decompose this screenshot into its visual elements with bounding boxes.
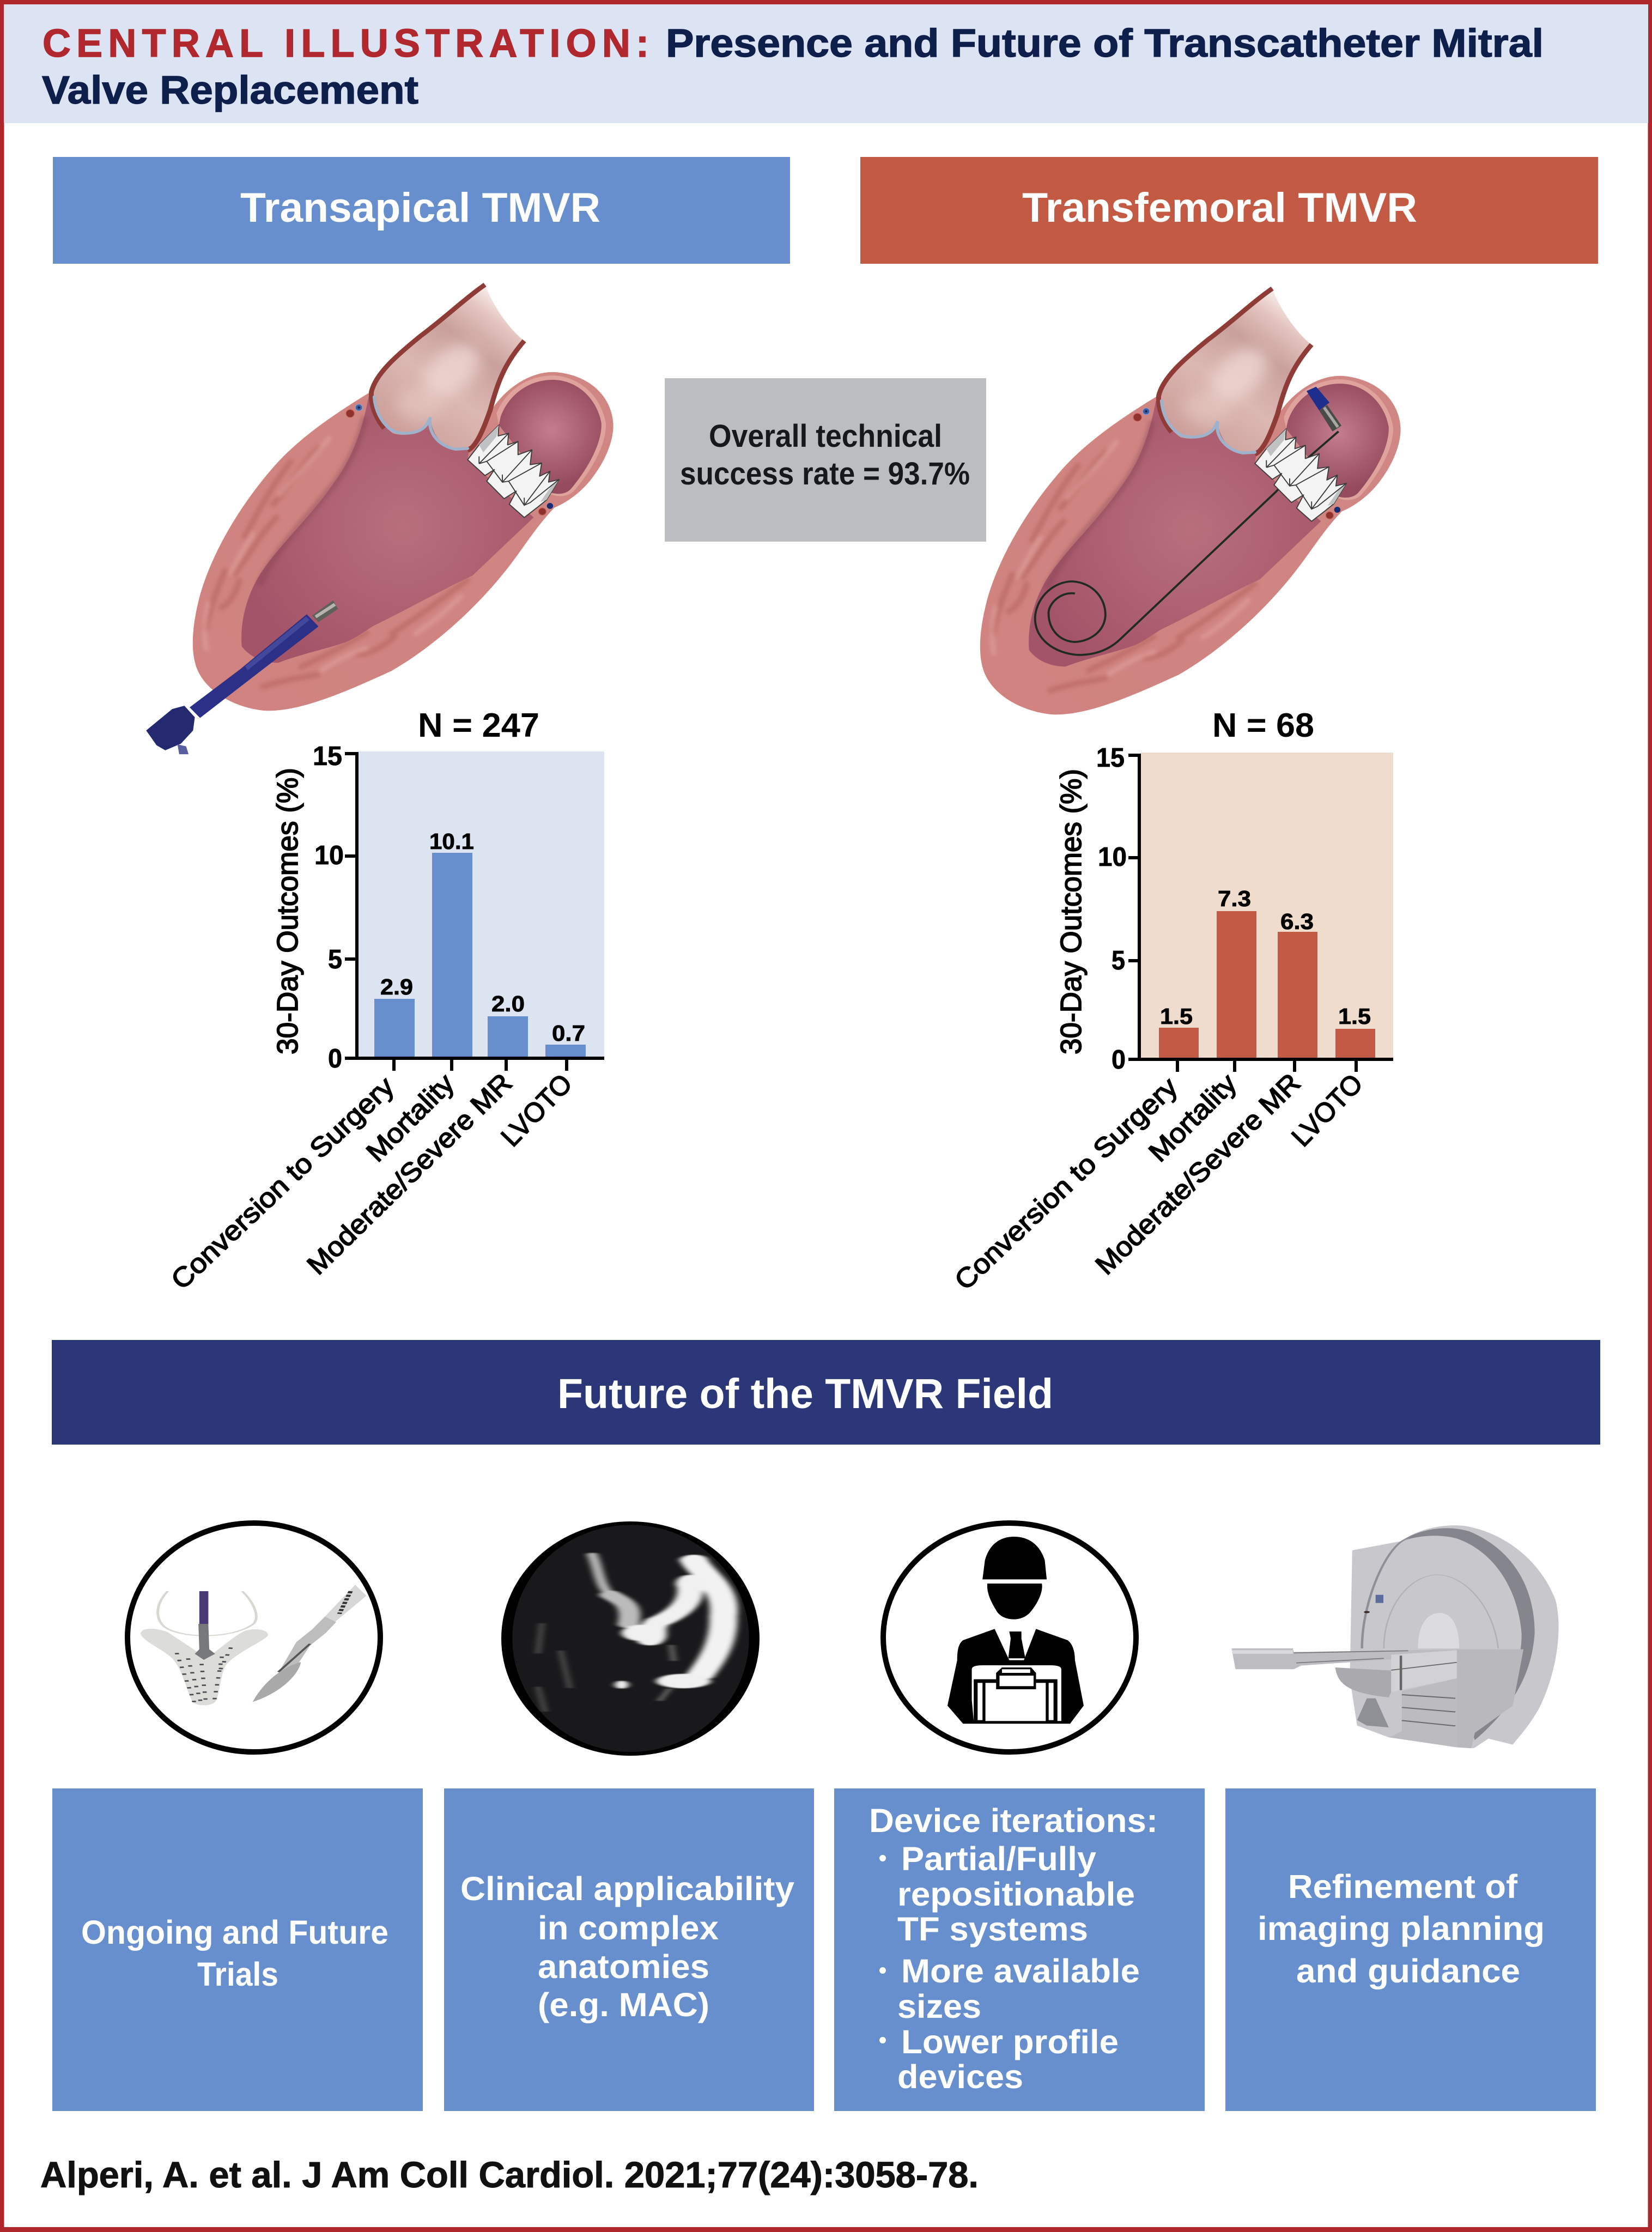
panel: imaging planning <box>1225 1788 1596 2111</box>
banner: Future of the TMVR Field <box>52 1340 1600 1445</box>
bar chart: transapical 30-day outcomes: 0.7 <box>552 1021 585 1046</box>
heading: Transfemoral TMVR <box>860 157 1598 264</box>
icon: lattice valve device and scalpel in circle <box>127 1523 380 1752</box>
panel: device iterations: Partial/Fully <box>901 1840 1096 1877</box>
bar chart: transfemoral 30-day outcomes: 30-Day Outcomes (%) <box>1055 769 1088 1054</box>
bar chart: transfemoral 30-day outcomes: 15 <box>1096 743 1125 773</box>
bar chart: transfemoral 30-day outcomes: Moderate/Severe MR <box>1090 1068 1306 1281</box>
bar chart: transfemoral 30-day outcomes: 10 <box>1098 842 1127 872</box>
bar chart: transfemoral 30-day outcomes: 1.5 <box>1338 1004 1371 1029</box>
bar chart: transapical 30-day outcomes: 2.0 <box>491 991 525 1016</box>
bar chart: transfemoral 30-day outcomes: 6.3 <box>1280 909 1314 934</box>
bar chart: transapical 30-day outcomes: 2.9 <box>380 974 413 999</box>
bar chart: transapical 30-day outcomes: N = 247 <box>418 707 539 744</box>
image: CT scan of mitral annular calcification <box>501 1521 760 1756</box>
panel: device iterations: More available <box>901 1952 1140 1990</box>
image: MRI scanner <box>1231 1525 1559 1748</box>
bar chart: transapical 30-day outcomes: 0 <box>328 1044 342 1073</box>
title band: Valve Replacement <box>42 69 418 112</box>
panel: device iterations: Device iterations: <box>869 1802 1158 1839</box>
callout: technical success rate: Overall technical <box>709 418 942 454</box>
panel: clinical applicability: Clinical applicability <box>460 1870 794 1907</box>
bar chart: transapical 30-day outcomes: 30-Day Outcomes (%) <box>271 768 304 1054</box>
panel: ongoing and future trials <box>52 1788 423 2111</box>
panel: clinical applicability: in complex <box>538 1909 719 1946</box>
bar chart: transapical 30-day outcomes: 5 <box>328 945 342 974</box>
bar chart: transfemoral 30-day outcomes: 5 <box>1112 946 1125 975</box>
bar chart: transapical 30-day outcomes: LVOTO <box>495 1068 578 1153</box>
panel: ongoing and future trials: Trials <box>197 1956 278 1993</box>
panel: imaging planning: Refinement of <box>1288 1868 1518 1905</box>
bar chart: transapical 30-day outcomes <box>165 707 604 1295</box>
callout: technical success rate <box>665 378 986 542</box>
panel: clinical applicability: anatomies <box>538 1948 709 1985</box>
bar chart: transapical 30-day outcomes: 10 <box>314 841 344 870</box>
heading: Transfemoral TMVR: Transfemoral TMVR <box>1022 185 1417 231</box>
panel: device iterations <box>834 1788 1205 2111</box>
banner: Future of the TMVR Field: Future of the TMVR Field <box>557 1370 1053 1417</box>
panel: device iterations: devices <box>897 2058 1023 2095</box>
heading: Transapical TMVR <box>53 157 790 264</box>
bar chart: transfemoral 30-day outcomes: Mortality <box>1143 1068 1242 1168</box>
bar chart: transfemoral 30-day outcomes: 7.3 <box>1218 886 1251 911</box>
callout: technical success rate: success rate = 93.7% <box>680 456 970 492</box>
bar chart: transfemoral 30-day outcomes: 0 <box>1112 1045 1126 1075</box>
bar chart: transfemoral 30-day outcomes <box>949 707 1393 1296</box>
title band <box>4 4 1648 123</box>
bar chart: transfemoral 30-day outcomes: Conversion to Surgery <box>949 1071 1183 1296</box>
panel: device iterations: Lower profile <box>901 2023 1119 2060</box>
panel: device iterations: TF systems <box>897 1910 1088 1948</box>
title band: Presence and Future of Transcatheter Mitral <box>666 22 1544 65</box>
bar chart: transfemoral 30-day outcomes: LVOTO <box>1286 1068 1369 1153</box>
heading: Transapical TMVR: Transapical TMVR <box>240 185 600 231</box>
title band: CENTRAL ILLUSTRATION: <box>42 22 649 65</box>
bar chart: transapical 30-day outcomes: Moderate/Severe MR <box>301 1068 518 1281</box>
panel: ongoing and future trials: Ongoing and Future <box>81 1914 388 1951</box>
icon: engineer with briefcase in circle <box>883 1523 1136 1752</box>
panel: imaging planning: imaging planning <box>1258 1910 1545 1947</box>
panel: imaging planning: and guidance <box>1296 1952 1520 1990</box>
panel: clinical applicability <box>444 1788 814 2111</box>
illustration: transfemoral heart with guidewire <box>980 288 1401 714</box>
panel: device iterations: sizes <box>897 1988 981 2025</box>
bar chart: transfemoral 30-day outcomes: N = 68 <box>1212 707 1314 744</box>
bar chart: transapical 30-day outcomes: 10.1 <box>429 829 474 854</box>
illustration: transapical heart with catheter <box>146 284 614 754</box>
bar chart: transapical 30-day outcomes: Conversion to Surgery <box>165 1071 400 1295</box>
citation: Alperi, A. et al. J Am Coll Cardiol. 2021;77(24):3058-78. <box>40 2155 979 2195</box>
bar chart: transfemoral 30-day outcomes: 1.5 <box>1160 1004 1193 1029</box>
bar chart: transapical 30-day outcomes: 15 <box>313 742 342 771</box>
panel: clinical applicability: (e.g. MAC) <box>538 1986 709 2023</box>
bar chart: transapical 30-day outcomes: Mortality <box>360 1068 460 1168</box>
panel: device iterations: repositionable <box>897 1876 1135 1913</box>
